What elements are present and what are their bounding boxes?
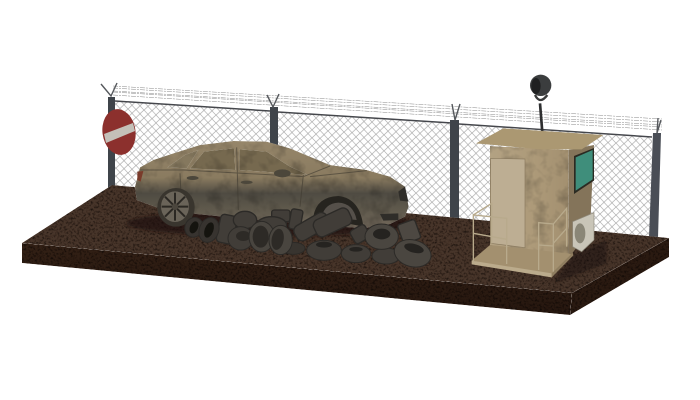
roof: [476, 128, 603, 149]
car windows: [167, 148, 308, 175]
door: [491, 158, 525, 248]
guard booth: [472, 75, 607, 283]
fence posts: [108, 97, 661, 238]
booth shadow: [553, 240, 607, 283]
platform: [472, 245, 573, 277]
no-entry sign: [99, 107, 139, 157]
front tires: [307, 224, 434, 271]
car details: [140, 147, 367, 210]
car shadow: [127, 210, 413, 237]
rear wheel: [157, 188, 195, 227]
post barbed arms: [101, 83, 661, 133]
top rails: [115, 101, 652, 137]
car mirror and handles: [187, 169, 291, 184]
ground side faces: [22, 238, 669, 315]
car: [127, 141, 413, 237]
chain-link fence: [101, 83, 662, 250]
car body: [135, 141, 409, 228]
car grille: [137, 171, 408, 221]
front wheel: [313, 196, 363, 227]
searchlight: [530, 75, 551, 139]
railings: [473, 203, 567, 272]
back tires: [216, 206, 421, 245]
air conditioner: [573, 213, 594, 252]
left tire pair: [182, 214, 222, 245]
front wall: [490, 146, 568, 258]
middle tires: [228, 221, 305, 255]
fence mesh: [115, 101, 652, 250]
side wall: [568, 145, 594, 258]
barbed wire: [113, 86, 662, 130]
tire pile: [182, 206, 434, 271]
soil ground slab: [22, 185, 669, 315]
window: [574, 148, 594, 194]
ground top face: [22, 185, 669, 293]
